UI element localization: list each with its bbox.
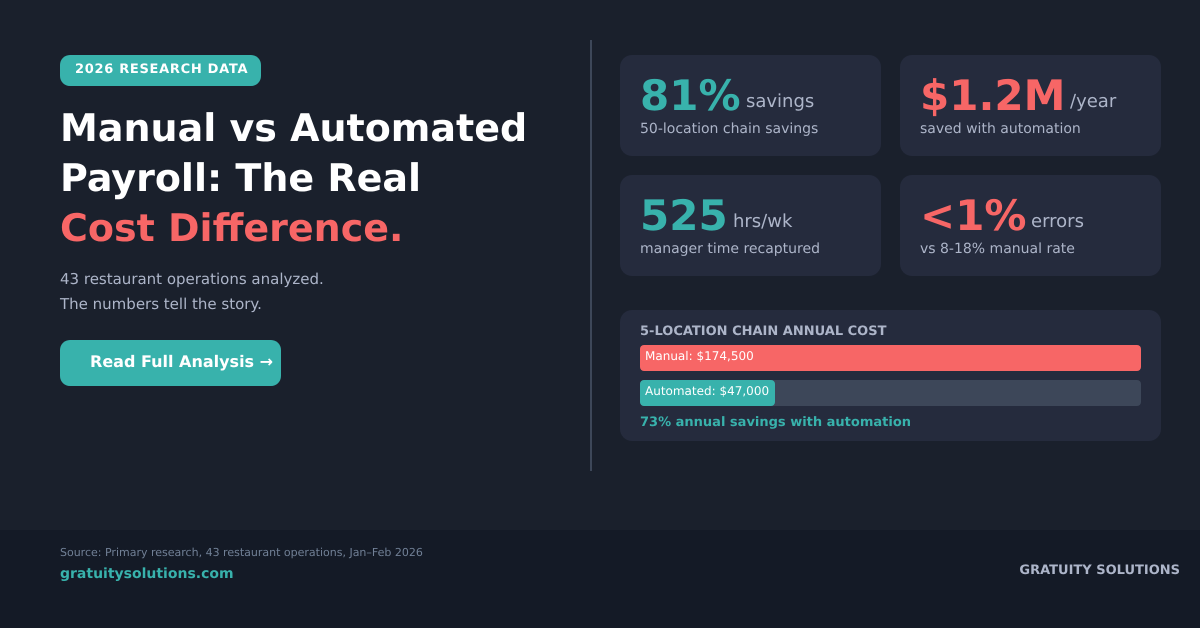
title [60,106,527,250]
stat card: 525 hrs/wk [620,175,881,276]
savings note: 73% annual savings with automation [640,415,911,430]
bar: manual: Manual: $174,500 [645,349,754,363]
subtitle text: 43 restaurant operations analyzed. [60,270,324,288]
title: Manual vs Automated [60,106,527,150]
stat card: 81% savings [620,55,881,156]
brand name: GRATUITY SOLUTIONS [1019,563,1180,578]
vertical divider [590,40,592,471]
panel: annual cost comparison [620,310,1161,441]
title: Cost Difference. [60,206,403,250]
stat card: 81% savings: 50-location chain savings [640,121,818,137]
stat card: under 1% errors: vs 8-18% manual rate [920,241,1075,257]
stat card: 525 hrs/wk: 525 [640,191,728,240]
stat card: under 1% errors: <1% [920,191,1026,240]
stat card: $1.2M per year: $1.2M [920,71,1065,120]
badge: 2026 research data: 2026 RESEARCH DATA [75,62,248,77]
stat card: $1.2M per year: saved with automation [920,121,1081,137]
stat card: 81% savings: savings [746,91,814,112]
stat card: 81% savings: 81% [640,71,741,120]
stat card: $1.2M per year: /year [1070,91,1116,112]
stat card: under 1% errors [900,175,1161,276]
bar track: automated [640,380,1141,406]
subtitle text [60,270,324,313]
bar: manual [640,345,1141,371]
stat card: $1.2M per year [900,55,1161,156]
source text: Source: Primary research, 43 restaurant operations, Jan–Feb 2026 [60,546,423,559]
bar: automated [640,380,775,406]
subtitle text: The numbers tell the story. [60,295,262,313]
panel heading: 5-LOCATION CHAIN ANNUAL COST [640,324,886,339]
button: read full analysis: Read Full Analysis → [90,352,273,371]
badge: 2026 research data [60,55,261,86]
stat card: under 1% errors: errors [1031,211,1084,232]
stat card: 525 hrs/wk: manager time recaptured [640,241,820,257]
stat card: 525 hrs/wk: hrs/wk [733,211,792,232]
bar: automated: Automated: $47,000 [645,384,769,398]
footer band [0,530,1200,628]
button: read full analysis [60,340,281,386]
title: Payroll: The Real [60,156,421,200]
website link: gratuitysolutions.com [60,566,234,582]
